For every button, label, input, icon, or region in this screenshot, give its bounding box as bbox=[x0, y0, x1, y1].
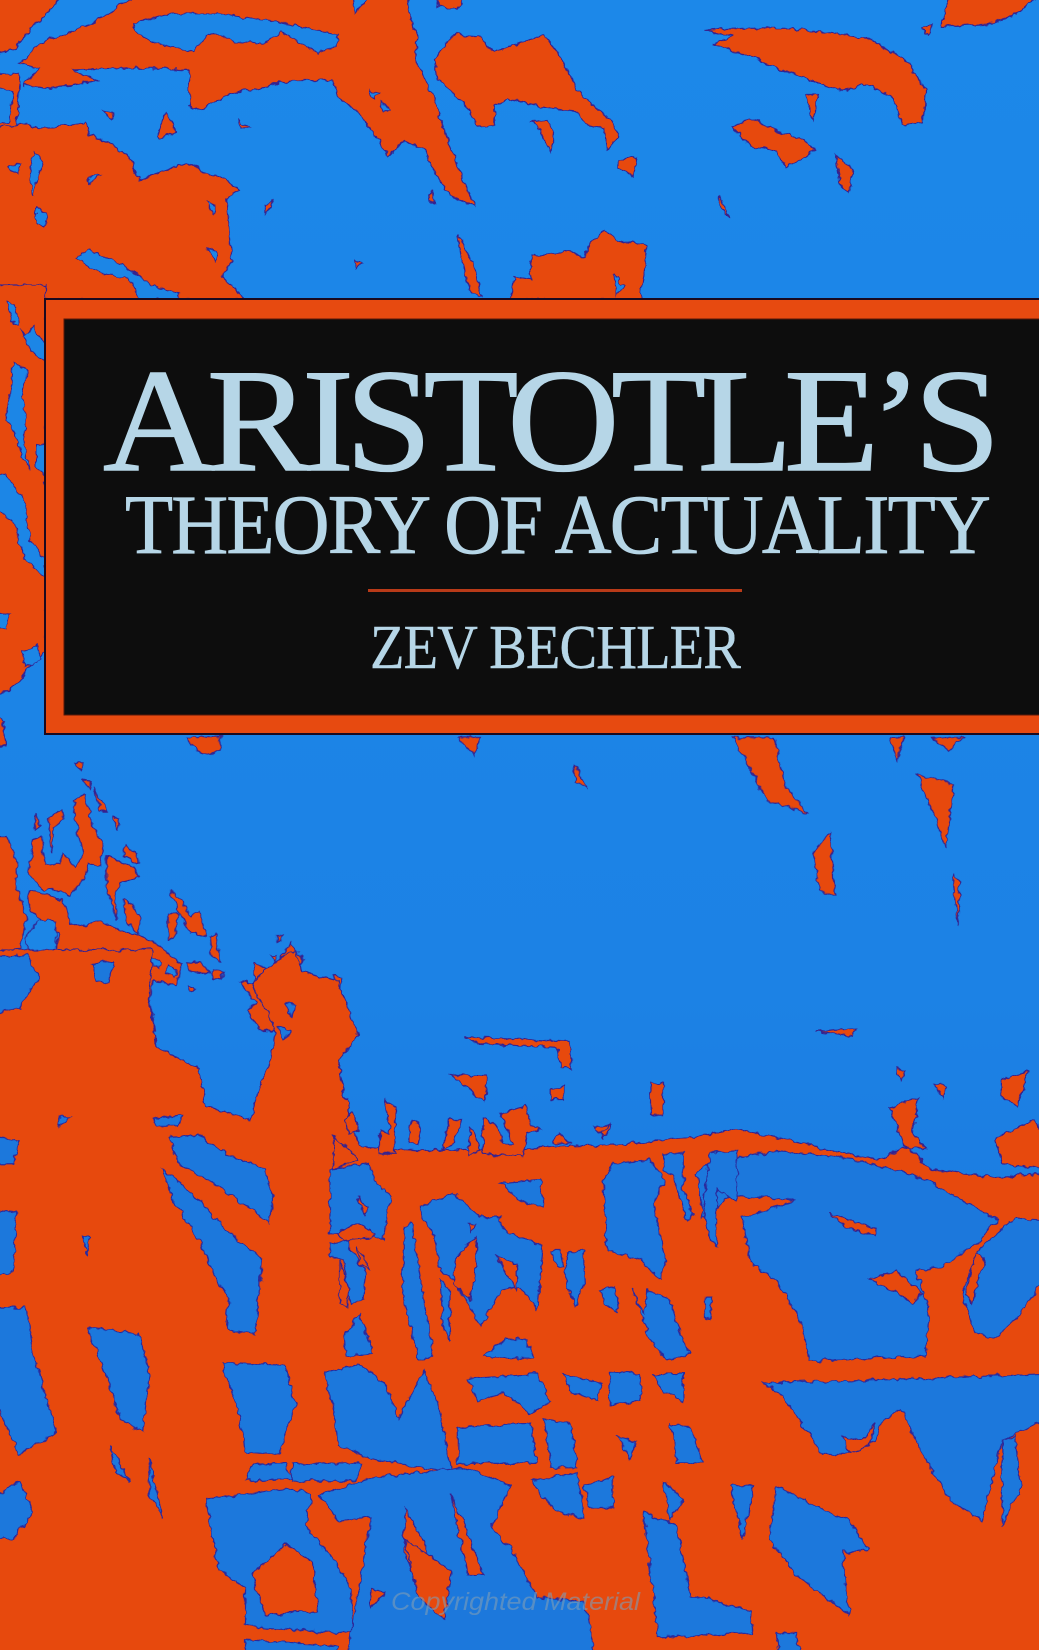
panel: orange frame with dark outline bbox=[45, 299, 1039, 734]
scattered orange shapes below panel bbox=[457, 737, 964, 927]
upper orange shapes bbox=[0, 0, 1039, 320]
divider line bbox=[368, 589, 742, 592]
author name: ZEV BECHLER bbox=[370, 614, 741, 682]
left margin strip beside panel bbox=[0, 285, 46, 750]
mid-left orange fragments bbox=[0, 737, 353, 1030]
heading: Theory of Actuality: THEORY OF ACTUALITY bbox=[125, 478, 990, 572]
lower orange mass bbox=[0, 950, 1039, 1650]
title panel bbox=[45, 299, 1039, 734]
heading: ARISTOTLE'S: ARISTOTLE’S bbox=[103, 339, 992, 502]
central lower detail bbox=[330, 1100, 737, 1360]
panel: black inner field bbox=[64, 319, 1039, 715]
copyright watermark: Copyrighted Material bbox=[391, 1588, 642, 1616]
